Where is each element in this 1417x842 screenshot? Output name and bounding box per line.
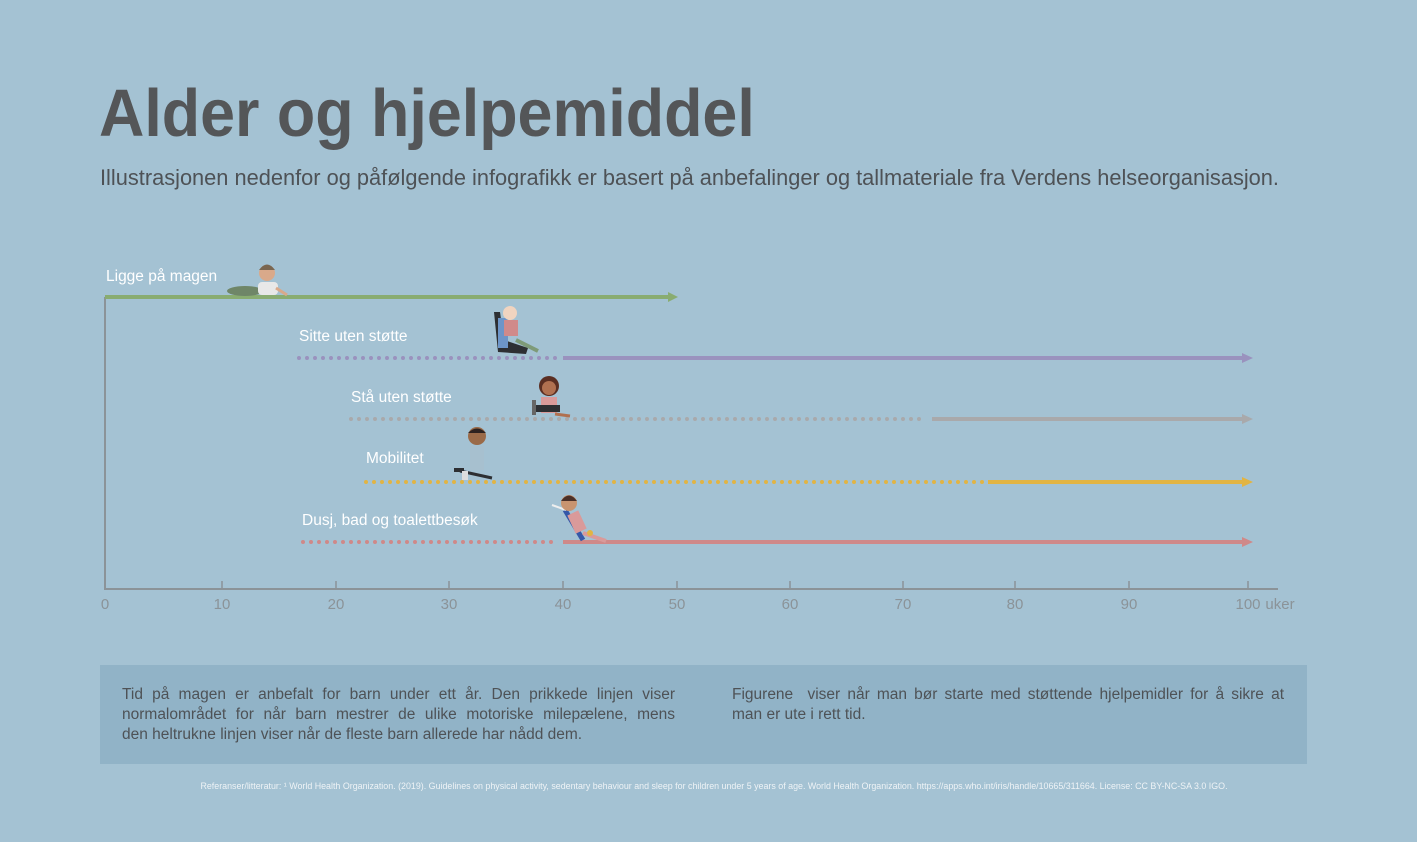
subtitle: Illustrasjonen nedenfor og påfølgende infografikk er basert på anbefalinger og tallmateriale fra Verdens helseorganisasjon. [100,165,1279,190]
row: Dusj, bad og toalettbesøk: Dusj, bad og toalettbesøk [302,512,478,529]
row: Sitte uten støtte [299,306,1253,363]
row: Stå uten støtte [351,376,1253,424]
axis labels: 90 [1121,596,1137,613]
icon: baby on tummy [227,264,287,296]
text block: left: Tid på magen er anbefalt for barn under ett år. Den prikkede linjen viser [122,686,675,703]
axis labels: 80 [1007,596,1023,613]
text block: left: normalområdet for når barn mestrer de ulike motoriske milepælene, mens [122,706,675,723]
axis labels: 70 [895,596,911,613]
row: Mobilitet [366,427,1253,487]
title: Alder og hjelpemiddel [99,76,755,151]
row: Stå uten støtte: Stå uten støtte [351,389,452,406]
axis labels: 100 [1235,596,1261,613]
axis labels: 0 [101,596,109,613]
axis labels: 30 [441,596,457,613]
icon: standing child [532,376,570,416]
icon: child with walker [454,427,492,480]
text block: left: den heltrukne linjen viser når de fleste barn allerede har nådd dem. [122,726,582,743]
text block: right: Figurene viser når man bør starte med støttende hjelpemidler for å sikre at [732,686,1284,703]
axes [105,297,1278,590]
row: Dusj, bad og toalettbesøk [302,495,1253,547]
info box [100,665,1307,764]
axis labels: uker [1265,596,1295,613]
row: Ligge på magen [105,264,678,302]
text block: right: man er ute i rett tid. [732,706,866,723]
axis labels [101,596,1295,613]
row: Mobilitet: Mobilitet [366,450,424,467]
text block: left [122,686,675,743]
row: Sitte uten støtte: Sitte uten støtte [299,328,408,345]
axis labels: 40 [555,596,571,613]
axis labels: 20 [328,596,344,613]
icon: child in bath chair [552,495,606,541]
references footnote: Referanser/litteratur: ¹ World Health Organization. (2019). Guidelines on physical activity, sedentary behaviour and sleep for children under 5 years of age. World Health Organization. https://apps.who.int/iris/handle/10665/311664. License: CC BY-NC-SA 3.0 IGO. [200,781,1228,791]
axis labels: 60 [782,596,798,613]
chart [101,264,1295,613]
icon: child in seat [494,306,538,354]
text block: right [732,686,1284,723]
row: Ligge på magen: Ligge på magen [106,268,217,285]
axis labels: 50 [669,596,685,613]
axis labels: 10 [214,596,230,613]
